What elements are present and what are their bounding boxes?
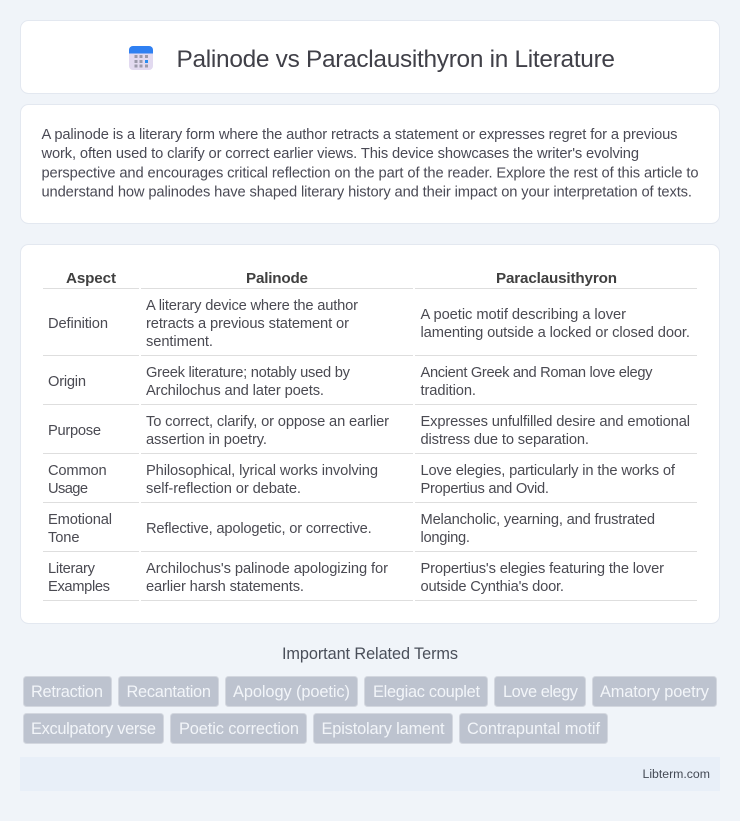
row: purpose: distress due to separation.	[420, 432, 589, 448]
row: common usage: self-reflection or debate.	[146, 481, 301, 497]
intro paragraph: understand how palinodes have shaped literary history and their impact on your interpretation of texts.	[42, 185, 692, 201]
row: origin: Greek literature; notably used by	[146, 365, 351, 381]
icon: calendar	[129, 46, 153, 70]
intro paragraph	[40, 127, 698, 201]
row: origin: Origin	[48, 374, 86, 390]
row: emotional tone: Reflective, apologetic, or corrective.	[146, 521, 372, 537]
table header: Paraclausithyron	[496, 270, 617, 287]
row: definition: Definition	[48, 316, 108, 332]
row: definition: retracts a previous statement or	[146, 316, 349, 332]
row: literary examples: earlier harsh statements.	[146, 579, 304, 595]
row: literary examples: Archilochus's palinode apologizing for	[146, 561, 388, 577]
row: literary examples	[43, 561, 697, 601]
panel: introduction	[20, 104, 720, 224]
intro paragraph: work, often used to clarify or correct earlier views. This device showcases the writer's evolving	[40, 146, 639, 162]
row: common usage: Philosophical, lyrical works involving	[146, 463, 378, 479]
related term tags: Poetic correction	[179, 720, 299, 738]
table header: Palinode	[246, 270, 308, 287]
footer: Libterm.com	[642, 767, 710, 781]
table header: Aspect	[66, 270, 116, 287]
related term tags	[24, 676, 716, 744]
row: definition: A poetic motif describing a lover	[420, 307, 626, 323]
row: definition	[43, 298, 697, 356]
table header	[43, 270, 697, 289]
row: origin: tradition.	[420, 383, 476, 399]
heading: related terms: Important Related Terms	[282, 645, 458, 663]
intro paragraph: A palinode is a literary form where the author retracts a statement or expresses regret for a previous	[42, 127, 678, 143]
row: purpose: Expresses unfulfilled desire and emotional	[420, 414, 690, 430]
row: literary examples: Literary	[48, 561, 96, 577]
row: emotional tone: Tone	[48, 530, 80, 546]
row: common usage: Propertius and Ovid.	[420, 481, 549, 497]
row: literary examples: Examples	[48, 579, 110, 595]
row: origin: Archilochus and later poets.	[146, 383, 324, 399]
row: common usage: Love elegies, particularly in the works of	[420, 463, 676, 479]
related term tags: Elegiac couplet	[373, 683, 480, 701]
related term tags: Apology (poetic)	[233, 683, 350, 701]
title: Palinode vs Paraclausithyron in Literature	[176, 46, 615, 73]
row: definition: lamenting outside a locked or closed door.	[420, 325, 690, 341]
row: common usage: Usage	[48, 481, 88, 497]
footer	[20, 757, 720, 791]
row: emotional tone: Emotional	[48, 512, 112, 528]
row: origin: Ancient Greek and Roman love elegy	[420, 365, 653, 381]
row: literary examples: Propertius's elegies featuring the lover	[420, 561, 664, 577]
row: origin	[43, 365, 697, 405]
row: purpose: assertion in poetry.	[146, 432, 267, 448]
row: common usage	[43, 463, 697, 503]
row: common usage: Common	[48, 463, 107, 479]
related term tags: Amatory poetry	[600, 683, 710, 701]
related term tags: Retraction	[31, 683, 103, 701]
row: emotional tone: Melancholic, yearning, and frustrated	[420, 512, 655, 528]
related term tags: Epistolary lament	[322, 720, 445, 738]
intro paragraph: perspective and encourages critical reflection on the part of the reader. Explore the rest of this article to	[42, 166, 698, 182]
related term tags: Contrapuntal motif	[467, 720, 600, 738]
related term tags: Recantation	[126, 683, 211, 701]
related term tags: Love elegy	[503, 683, 579, 701]
row: emotional tone	[43, 512, 697, 552]
row: purpose	[43, 414, 697, 454]
row: definition: sentiment.	[146, 334, 213, 350]
row: purpose: To correct, clarify, or oppose an earlier	[146, 414, 389, 430]
row: literary examples: outside Cynthia's door.	[420, 579, 564, 595]
row: emotional tone: longing.	[420, 530, 470, 546]
related term tags: Exculpatory verse	[31, 720, 156, 738]
row: purpose: Purpose	[48, 423, 101, 439]
panel: comparison table	[20, 244, 720, 624]
row: definition: A literary device where the author	[146, 298, 358, 314]
panel: header	[20, 20, 720, 94]
